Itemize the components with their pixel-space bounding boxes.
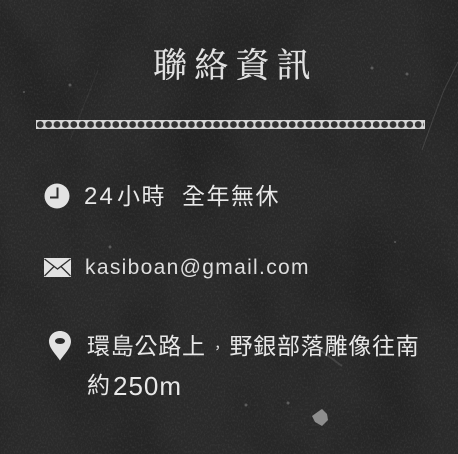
address text: 環島公路上 野銀部落雕像往南 [87, 333, 420, 359]
decorative speck [312, 409, 328, 426]
icon: envelope [44, 258, 71, 277]
email text: kasiboan@gmail.com [85, 256, 310, 279]
hours text: 24 [84, 183, 115, 210]
address text: ， [211, 340, 225, 356]
title: 聯絡資訊 [153, 48, 318, 85]
icon: clock [44, 184, 70, 208]
hours text: 小時 [117, 183, 166, 209]
address text [87, 333, 420, 401]
address text: 250m [113, 371, 182, 401]
icon: map pin [49, 331, 71, 360]
hours text [84, 183, 280, 210]
address text: 約 [87, 372, 110, 398]
hours text: 全年無休 [182, 183, 280, 209]
